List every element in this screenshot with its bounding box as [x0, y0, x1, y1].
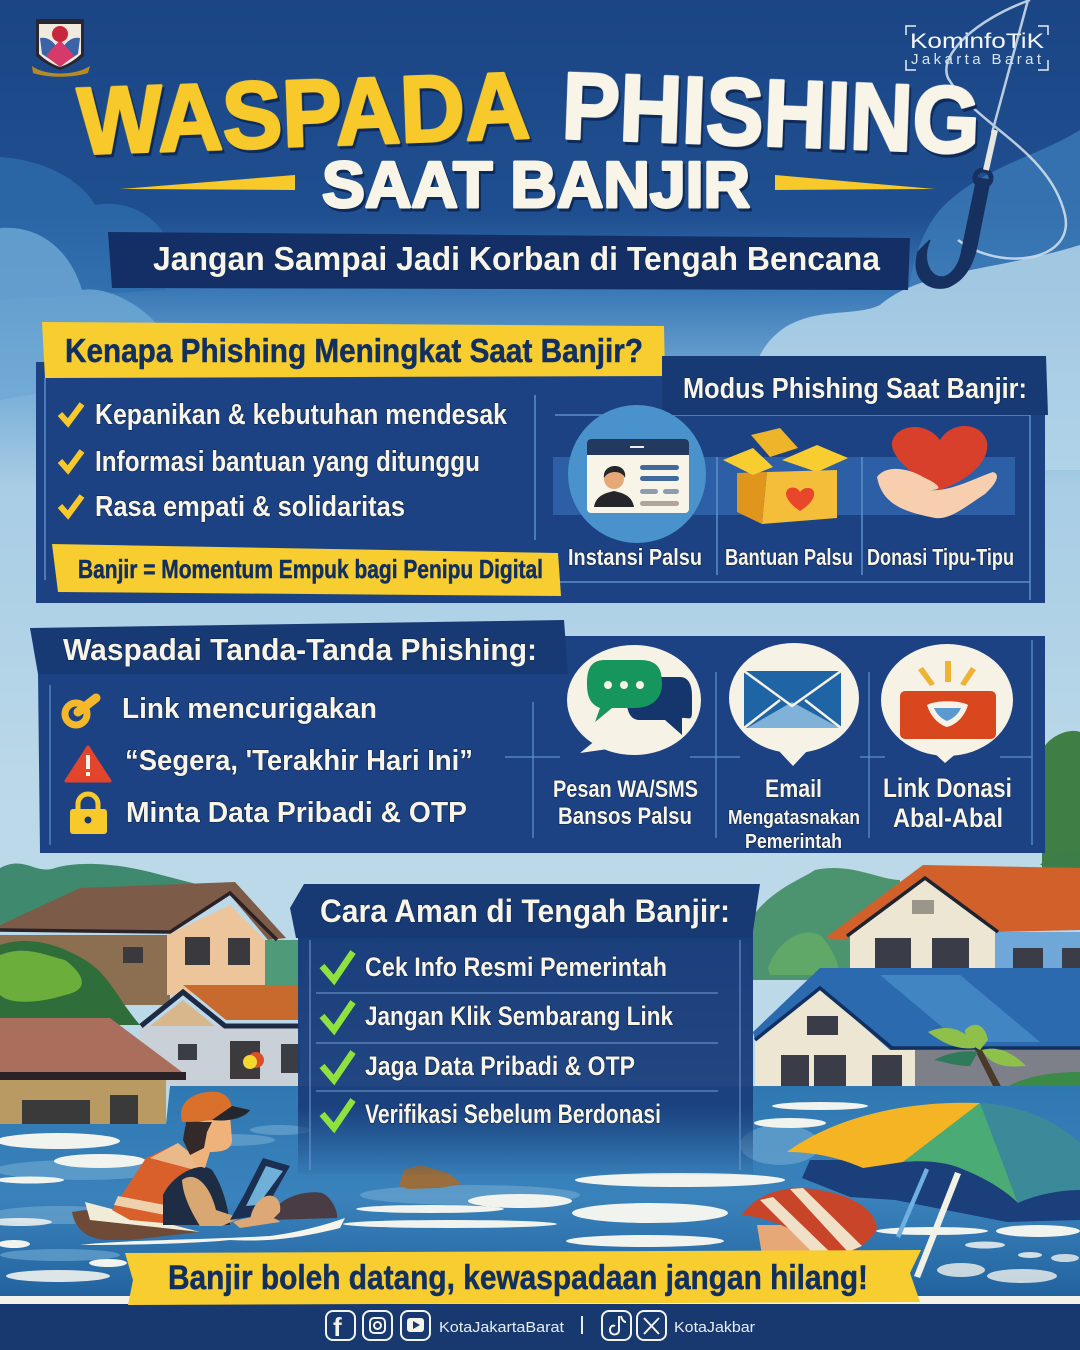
- decorative wedge left: [120, 175, 295, 190]
- panel: tanda-tanda phishing: [30, 620, 1045, 853]
- grid lines: [45, 378, 1030, 600]
- logo: crest: [32, 19, 90, 77]
- label: Instansi Palsu: Instansi Palsu: [568, 544, 702, 570]
- reason 2: Informasi bantuan yang ditunggu: [95, 446, 480, 478]
- label: Pemerintah: Pemerintah: [745, 831, 842, 853]
- yellow callout: [52, 544, 561, 596]
- grid lines: [50, 640, 1032, 845]
- social icons: [326, 1311, 666, 1340]
- grid lines: [310, 940, 740, 1170]
- title: SAAT BANJIR: SAAT BANJIR: [322, 148, 750, 221]
- icon: link: [65, 698, 96, 725]
- subtitle banner: [108, 232, 910, 290]
- closing banner: [125, 1250, 921, 1305]
- label: Mengatasnakan: Mengatasnakan: [728, 807, 860, 829]
- reason 3: Rasa empati & solidaritas: [95, 491, 405, 523]
- icon: lock: [70, 794, 107, 834]
- youtube glyph: [407, 1318, 424, 1332]
- panel: cara aman: [290, 884, 760, 1175]
- title: WASPADA: WASPADA: [76, 52, 531, 175]
- icon: donation link bubble: [881, 644, 1013, 763]
- icon: warning: [66, 747, 110, 781]
- worker on raft: [72, 1092, 345, 1245]
- sign 3: Minta Data Pribadi & OTP: [126, 797, 467, 829]
- yellow callout: Banjir = Momentum Empuk bagi Penipu Digital: [78, 554, 543, 584]
- step 2: Jangan Klik Sembarang Link: [365, 1001, 674, 1031]
- section heading: modus: [662, 356, 1048, 415]
- step 4: Verifikasi Sebelum Berdonasi: [365, 1099, 661, 1129]
- panel: kenapa phishing meningkat: [36, 322, 1048, 603]
- separator: [581, 1316, 583, 1334]
- label: Abal-Abal: Abal-Abal: [893, 803, 1003, 833]
- logo wordmark: KominfoTiK: [910, 30, 1044, 53]
- label: Email: Email: [765, 775, 822, 803]
- section heading: Waspadai Tanda-Tanda Phishing:: [63, 632, 537, 667]
- label: Donasi Tipu-Tipu: Donasi Tipu-Tipu: [867, 544, 1014, 570]
- section heading: Cara Aman di Tengah Banjir:: [320, 893, 730, 929]
- icon: heart in hand: [877, 426, 997, 518]
- background trees: [0, 731, 1080, 985]
- icon: ID card: [568, 405, 706, 543]
- section heading: kenapa: [42, 322, 665, 378]
- fishing hook: [916, 130, 995, 288]
- logo subtitle: Jakarta Barat: [911, 51, 1042, 68]
- subtitle banner: Jangan Sampai Jadi Korban di Tengah Bencana: [153, 240, 881, 277]
- step 1: Cek Info Resmi Pemerintah: [365, 952, 667, 982]
- label: Pesan WA/SMS: Pesan WA/SMS: [553, 776, 698, 803]
- houses right: [753, 865, 1080, 1150]
- fishing line: [946, 0, 1066, 259]
- reason 1: Kepanikan & kebutuhan mendesak: [95, 399, 508, 431]
- label: Bantuan Palsu: Bantuan Palsu: [725, 544, 853, 570]
- sign 1: Link mencurigakan: [122, 693, 377, 725]
- closing banner: Banjir boleh datang, kewaspadaan jangan hilang!: [168, 1259, 868, 1297]
- title: PHISHING: PHISHING: [560, 53, 982, 174]
- label: Bansos Palsu: Bansos Palsu: [558, 803, 692, 830]
- modus section lighter band: [553, 457, 1015, 515]
- section heading: kenapa: Kenapa Phishing Meningkat Saat Banjir?: [65, 332, 643, 369]
- umbrella: [787, 1103, 1080, 1278]
- footer bar: [0, 1296, 1080, 1350]
- sign 2: “Segera, 'Terakhir Hari Ini”: [125, 745, 473, 777]
- label: Link Donasi: Link Donasi: [883, 773, 1012, 803]
- handle: KotaJakbar: KotaJakbar: [674, 1319, 755, 1336]
- icon: email bubble: [729, 643, 859, 766]
- handle: KotaJakartaBarat: KotaJakartaBarat: [439, 1319, 565, 1336]
- step 3: Jaga Data Pribadi & OTP: [365, 1051, 635, 1081]
- flood water: [0, 1086, 1080, 1310]
- section heading: [30, 620, 568, 674]
- person with striped helmet: [742, 1188, 877, 1255]
- rock: [399, 1165, 462, 1189]
- icon: gift box: [723, 428, 848, 524]
- section heading: modus: Modus Phishing Saat Banjir:: [683, 373, 1027, 405]
- facebook letter: f: [333, 1312, 342, 1342]
- section heading: [290, 884, 760, 938]
- houses left: [0, 882, 300, 1124]
- icon: chat bubble: [567, 645, 701, 755]
- logo: Kominfotik Jakarta Barat: [906, 26, 1048, 70]
- decorative wedge right: [775, 175, 935, 190]
